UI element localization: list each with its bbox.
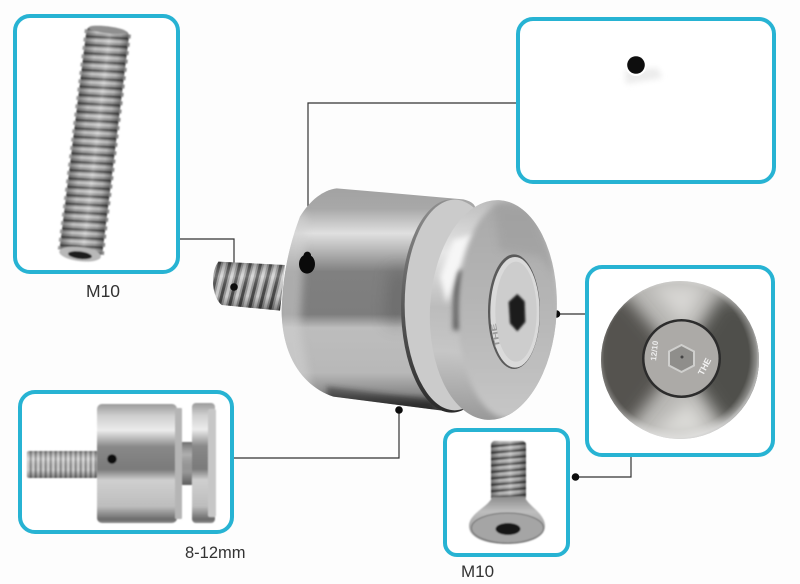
- icon: bolt photo: [469, 441, 545, 544]
- label: glass thickness: 8-12mm: [185, 544, 246, 562]
- connector dot: stud: [230, 283, 238, 291]
- leader line: front view to bolt: [575, 457, 631, 477]
- connector dot: front view: [553, 310, 560, 318]
- cap head: [430, 200, 557, 420]
- engraved marking: THE: [696, 356, 713, 377]
- cylinder body: [277, 188, 475, 420]
- engraved marking: 12/10: [649, 340, 660, 361]
- leader line: set screw to stud: [180, 239, 234, 287]
- connector dot: bolt panel: [572, 473, 579, 481]
- grub hole: [299, 252, 315, 274]
- panel: threaded stud: [15, 16, 178, 272]
- icon: smudge beneath hole: [625, 68, 662, 84]
- panel: hole detail: [518, 19, 774, 182]
- main photo: connector: [213, 188, 562, 423]
- label: M10 bolt: M10: [461, 562, 494, 581]
- icon: countersunk screw: [642, 319, 721, 398]
- leader line: side view to body: [234, 411, 399, 458]
- panel: flat head bolt: [445, 430, 568, 555]
- label: M10 stud: M10: [86, 281, 120, 301]
- panel: side view: [20, 392, 232, 532]
- icon: hole: [626, 55, 646, 76]
- icon: disc head photo: [601, 281, 759, 439]
- icon: side view connector photo: [27, 403, 216, 523]
- threaded stud: [213, 262, 285, 311]
- countersunk screw: [488, 254, 540, 369]
- icon: threaded stud photo: [58, 24, 130, 264]
- panel: front view: [587, 267, 773, 455]
- leader line: hole detail to grub hole: [308, 103, 516, 258]
- glass gasket: [401, 199, 505, 413]
- engraved marking: THE: [490, 322, 502, 348]
- leader line: front view to head: [557, 313, 585, 315]
- connector dot: body underside: [395, 406, 403, 414]
